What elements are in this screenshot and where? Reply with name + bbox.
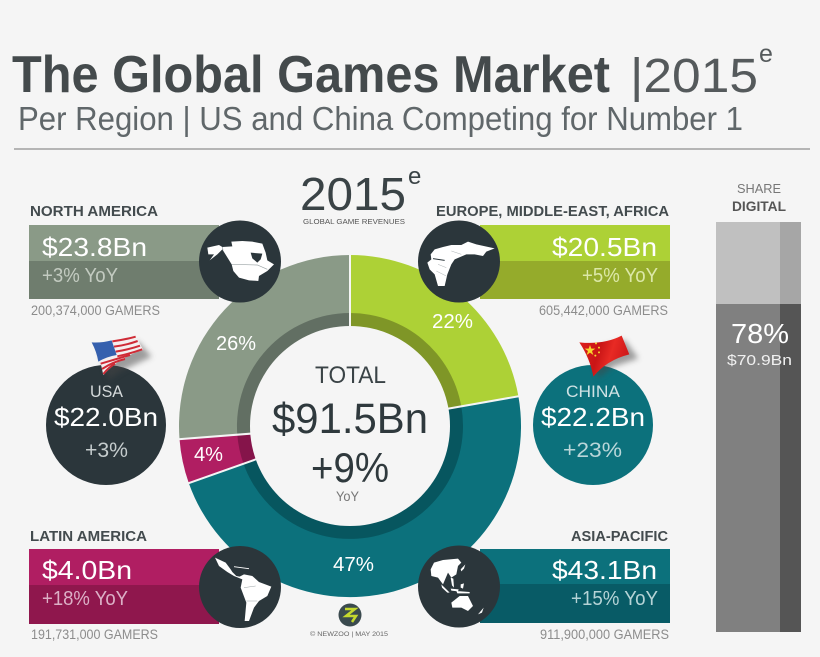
logo: Newzoo — [338, 604, 362, 626]
panel: Europe, Middle-East, Africa: +5% YoY — [582, 265, 658, 287]
segment: North America 26% — [179, 255, 350, 439]
panel: Asia-Pacific: ASIA-PACIFIC — [571, 529, 669, 545]
value: 78% digital — [727, 318, 792, 369]
panel: Latin America: LATIN AMERICA — [30, 529, 148, 545]
callout: USA: USA — [90, 382, 124, 401]
icon: Latin America map — [199, 546, 281, 628]
panel: Latin America: +18% YoY — [42, 588, 128, 610]
label: 26%: 26% — [216, 333, 256, 355]
icon: Asia-Pacific map — [418, 546, 500, 628]
heading: 2015 global game revenues: e — [408, 163, 421, 190]
panel: Europe, Middle-East, Africa: 605,442,000 GAMERS — [539, 303, 668, 318]
panel: Latin America: $4.0Bn — [42, 555, 132, 585]
heading: 2015 global game revenues: 2015 — [300, 168, 406, 220]
donut centre: total: YoY — [336, 488, 360, 504]
icon: North America map — [199, 220, 281, 302]
heading: share digital — [732, 181, 786, 214]
label: 47%: 47% — [333, 554, 374, 576]
panel: North America: +3% YoY — [42, 265, 118, 287]
callout: China: $22.2Bn — [541, 402, 645, 432]
segment: Asia-Pacific 47% — [189, 396, 521, 597]
panel: share digital bar — [716, 181, 801, 632]
panel: Asia-Pacific: 911,900,000 GAMERS — [540, 627, 669, 642]
donut centre: total: $91.5Bn — [272, 395, 428, 443]
panel: Europe, Middle-East, Africa — [418, 204, 670, 318]
heading: share digital: SHARE — [737, 181, 781, 196]
panel: Asia-Pacific: $43.1Bn — [552, 555, 657, 585]
label: 4%: 4% — [194, 444, 223, 466]
label: 22%: 22% — [432, 311, 473, 333]
callout: China: +23% — [563, 439, 622, 462]
panel: North America: 200,374,000 GAMERS — [31, 303, 160, 318]
title: |2015 — [630, 50, 758, 103]
value: 78% digital: 78% — [731, 318, 789, 349]
panel: Latin America — [29, 529, 281, 642]
panel: North America: $23.8Bn — [42, 232, 147, 262]
segment: Europe, Middle-East, Africa 22% — [350, 255, 518, 426]
panel: Asia-Pacific: +15% YoY — [571, 588, 658, 610]
panel: Latin America: 191,731,000 GAMERS — [31, 627, 158, 642]
panel: Europe, Middle-East, Africa: EUROPE, MIDDLE-EAST, AFRICA — [436, 204, 670, 220]
icon: China flag — [579, 336, 638, 378]
title: e — [759, 40, 773, 68]
callout: China: CHINA — [566, 382, 621, 401]
heading: 2015 global game revenues — [300, 163, 421, 226]
subtitle: Per Region | US and China Competing for Number 1 — [18, 100, 743, 137]
callout: USA: +3% — [85, 439, 128, 462]
callout: USA — [46, 335, 166, 485]
callout: USA: $22.0Bn — [54, 402, 158, 432]
donut centre: total — [272, 362, 428, 504]
panel: North America — [29, 204, 281, 318]
panel: Europe, Middle-East, Africa: $20.5Bn — [552, 232, 657, 262]
panel: Asia-Pacific — [418, 529, 670, 642]
value: 78% digital: $70.9Bn — [727, 352, 792, 369]
panel: North America: NORTH AMERICA — [30, 204, 159, 220]
credit: © NEWZOO | MAY 2015 — [310, 630, 388, 638]
heading: share digital: DIGITAL — [732, 199, 786, 214]
title: The Global Games Market — [12, 46, 610, 104]
callout: China — [533, 336, 653, 485]
donut chart — [178, 254, 521, 597]
donut centre: total: TOTAL — [315, 362, 386, 389]
icon: EMEA map — [418, 220, 500, 302]
segment: Latin America 4% — [180, 426, 350, 483]
icon: US flag — [92, 335, 152, 380]
heading: 2015 global game revenues: GLOBAL GAME REVENUES — [303, 217, 405, 226]
donut centre: total: +9% — [311, 444, 389, 491]
